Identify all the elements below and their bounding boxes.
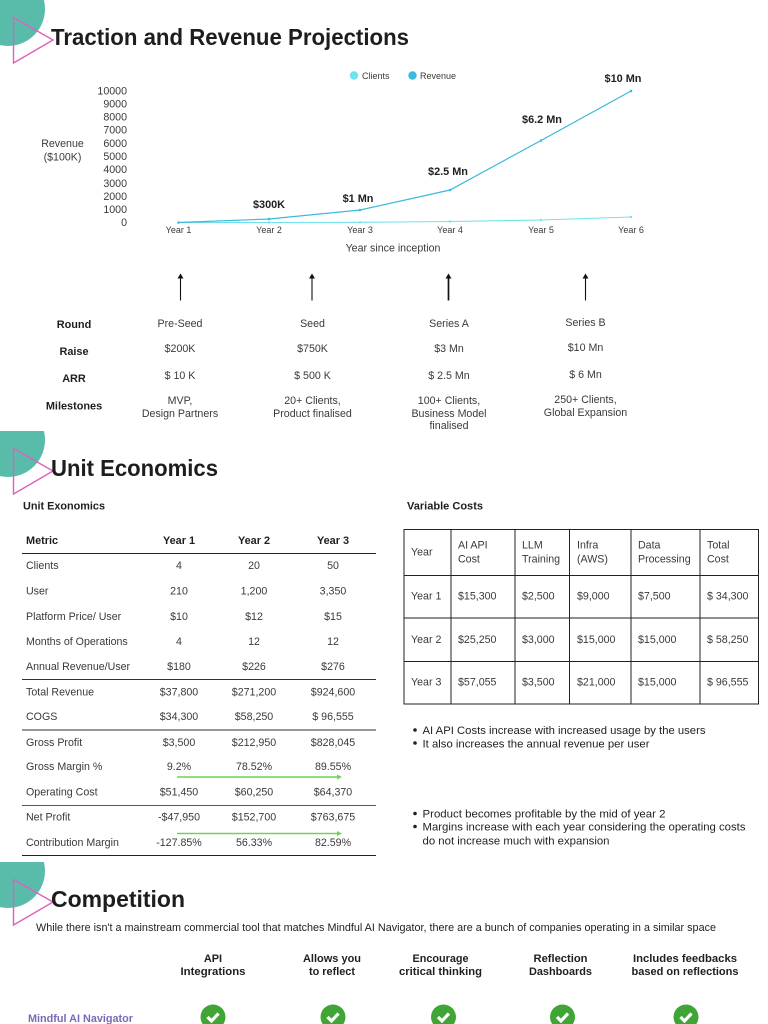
row: platform price: Platform Price/ User bbox=[26, 611, 122, 623]
table header: LLM bbox=[522, 540, 543, 552]
revenue data labels: $2.5 Mn bbox=[428, 166, 468, 178]
chart legend bbox=[350, 71, 456, 81]
row: operating cost: $51,450 bbox=[160, 786, 198, 798]
x axis labels: Year 4 bbox=[437, 225, 463, 235]
y axis title: ($100K) bbox=[44, 152, 81, 164]
row: platform price: $12 bbox=[245, 611, 263, 623]
row: year 3: $57,055 bbox=[458, 676, 497, 688]
row: clients: Clients bbox=[26, 560, 59, 572]
funding column: series a: $ 2.5 Mn bbox=[428, 370, 470, 382]
revenue data labels: $300K bbox=[253, 199, 285, 211]
funding column: seed: 20+ Clients, bbox=[284, 395, 341, 407]
bullet notes: profitability: Margins increase with each year considering the operating costs bbox=[422, 822, 746, 834]
y axis labels: 10000 bbox=[97, 86, 127, 98]
x axis labels: Year 5 bbox=[528, 225, 554, 235]
feature column headings: to reflect bbox=[309, 966, 355, 978]
row: year 2: $15,000 bbox=[577, 634, 616, 646]
row: year 1: $15,300 bbox=[458, 590, 497, 602]
revenue data labels: $1 Mn bbox=[343, 193, 373, 205]
x axis labels: Year 3 bbox=[347, 225, 373, 235]
table header: Year bbox=[411, 546, 433, 558]
y axis labels: 2000 bbox=[103, 191, 127, 203]
row: total revenue: $924,600 bbox=[311, 686, 355, 698]
bullet notes: profitability: do not increase much with expansion bbox=[422, 836, 610, 848]
row: gross margin: 78.52% bbox=[236, 761, 273, 773]
chart legend: Clients bbox=[362, 71, 390, 81]
row: operating cost: Operating Cost bbox=[26, 786, 98, 798]
y axis labels: 0 bbox=[121, 217, 127, 229]
funding column: series a: $3 Mn bbox=[434, 343, 464, 355]
funding column: series a: finalised bbox=[429, 420, 469, 432]
row: total revenue bbox=[26, 686, 355, 698]
funding column: seed: Seed bbox=[300, 318, 325, 330]
row: clients: 20 bbox=[248, 560, 260, 572]
row: operating cost: $60,250 bbox=[235, 786, 273, 798]
row: year 1: $7,500 bbox=[638, 590, 671, 602]
funding column: seed: $750K bbox=[297, 343, 328, 355]
row: user: User bbox=[26, 586, 49, 598]
table header: AI API bbox=[458, 540, 488, 552]
table header: Infra bbox=[577, 540, 598, 552]
row: platform price: $15 bbox=[324, 611, 342, 623]
row: total revenue: $37,800 bbox=[160, 686, 198, 698]
funding column: pre-seed bbox=[142, 318, 218, 420]
row: cogs: COGS bbox=[26, 711, 57, 723]
x axis labels: Year 1 bbox=[166, 225, 191, 235]
row: net profit: -$47,950 bbox=[158, 812, 200, 824]
funding column: seed: Product finalised bbox=[273, 408, 352, 420]
y axis labels: 7000 bbox=[103, 124, 127, 136]
row: year 1: Year 1 bbox=[411, 590, 441, 602]
row: operating cost: $64,370 bbox=[314, 786, 352, 798]
arrows: funding rounds bbox=[178, 274, 588, 300]
x axis labels bbox=[166, 225, 644, 235]
section: traction and revenue projections bbox=[0, 0, 644, 432]
table header: Metric bbox=[26, 535, 58, 547]
row: cogs bbox=[26, 711, 354, 723]
funding column: series b: 250+ Clients, bbox=[554, 394, 617, 406]
row: contribution margin bbox=[26, 837, 352, 849]
feature column headings: Dashboards bbox=[529, 966, 592, 978]
funding column: pre-seed: Design Partners bbox=[142, 408, 218, 420]
row: total revenue: $271,200 bbox=[232, 686, 276, 698]
funding column: series a: 100+ Clients, bbox=[418, 395, 480, 407]
bullet notes: profitability bbox=[413, 808, 746, 848]
funding table row labels: Milestones bbox=[46, 400, 102, 412]
table header: Year 2 bbox=[238, 535, 270, 547]
line chart: revenue and clients bbox=[41, 71, 644, 254]
x axis labels: Year 2 bbox=[256, 225, 282, 235]
row: year 1: $ 34,300 bbox=[707, 590, 749, 602]
funding column: pre-seed: $ 10 K bbox=[165, 370, 195, 382]
row: gross margin bbox=[26, 761, 352, 773]
row: year 3 bbox=[411, 676, 749, 688]
row: gross profit: $828,045 bbox=[311, 737, 355, 749]
row: year 3: Year 3 bbox=[411, 676, 441, 688]
funding column: pre-seed: MVP, bbox=[168, 395, 192, 407]
row: cogs: $ 96,555 bbox=[312, 711, 354, 723]
row: year 2: Year 2 bbox=[411, 634, 441, 646]
row: contribution margin: Contribution Margin bbox=[26, 837, 119, 849]
arrow: gross margin growth bbox=[177, 774, 342, 780]
row: months of operations: 4 bbox=[176, 636, 182, 648]
row: months of operations: 12 bbox=[327, 636, 339, 648]
y axis labels bbox=[97, 86, 127, 229]
subheading: variable costs: Variable Costs bbox=[407, 500, 483, 512]
table header: Processing bbox=[638, 554, 691, 566]
table header: Data bbox=[638, 540, 661, 552]
feature column headings: Encourage bbox=[412, 953, 468, 965]
feature column headings: critical thinking bbox=[399, 966, 482, 978]
feature column headings: Includes feedbacks bbox=[633, 953, 737, 965]
bullet notes: api costs: It also increases the annual revenue per user bbox=[422, 738, 650, 750]
funding column: series b: Global Expansion bbox=[544, 407, 627, 419]
row: platform price: $10 bbox=[170, 611, 188, 623]
feature column headings: API bbox=[204, 953, 222, 965]
table header bbox=[411, 540, 729, 566]
y axis labels: 9000 bbox=[103, 98, 127, 110]
funding column: pre-seed: Pre-Seed bbox=[158, 318, 203, 330]
row: year 2: $3,000 bbox=[522, 634, 555, 646]
row: year 3: $21,000 bbox=[577, 676, 616, 688]
row: cogs: $58,250 bbox=[235, 711, 273, 723]
chart legend: Revenue bbox=[420, 71, 456, 81]
row: net profit: $763,675 bbox=[311, 812, 355, 824]
subheading: unit exonomics: Unit Exonomics bbox=[23, 500, 105, 512]
table header: Year 1 bbox=[163, 535, 195, 547]
funding column: series b: Series B bbox=[565, 317, 606, 329]
revenue data labels: $6.2 Mn bbox=[522, 114, 562, 126]
row: user: 1,200 bbox=[241, 586, 267, 598]
section: unit economics bbox=[0, 403, 758, 856]
funding column: series b bbox=[544, 317, 627, 419]
row: year 1 bbox=[411, 590, 749, 602]
funding column: series a: Series A bbox=[429, 318, 470, 330]
row: contribution margin: -127.85% bbox=[156, 837, 202, 849]
row: gross margin: 89.55% bbox=[315, 761, 352, 773]
feature column headings bbox=[180, 953, 738, 978]
table header: Cost bbox=[458, 554, 480, 566]
table: unit economics bbox=[22, 535, 376, 856]
row: net profit bbox=[26, 812, 355, 824]
title: traction and revenue projections: Traction and Revenue Projections bbox=[51, 24, 409, 50]
arrow: contribution margin growth bbox=[177, 831, 342, 836]
y axis labels: 3000 bbox=[103, 178, 127, 190]
table: variable costs bbox=[404, 530, 758, 704]
funding column: series a bbox=[411, 318, 487, 432]
y axis labels: 6000 bbox=[103, 138, 127, 150]
y axis labels: 1000 bbox=[103, 204, 127, 216]
intro text: While there isn't a mainstream commercial tool that matches Mindful AI Navigator, there are a bunch of companies operating in a similar space bbox=[36, 922, 716, 934]
row: total revenue: Total Revenue bbox=[26, 686, 94, 698]
y axis title: Revenue bbox=[41, 138, 84, 150]
row: year 1: $9,000 bbox=[577, 590, 610, 602]
row: year 3: $15,000 bbox=[638, 676, 677, 688]
row: year 3: $3,500 bbox=[522, 676, 555, 688]
row: annual revenue per user: $226 bbox=[242, 661, 266, 673]
x axis labels: Year 6 bbox=[618, 225, 644, 235]
icon: teal circle and pink triangle bbox=[0, 862, 53, 926]
row: operating cost bbox=[26, 786, 352, 798]
row: gross profit: $3,500 bbox=[163, 737, 195, 749]
funding column: series b: $10 Mn bbox=[568, 342, 603, 354]
funding table row labels: ARR bbox=[62, 373, 86, 385]
y axis labels: 5000 bbox=[103, 151, 127, 163]
revenue line bbox=[177, 90, 632, 224]
feature column headings: Reflection bbox=[534, 953, 588, 965]
row: year 2: $25,250 bbox=[458, 634, 497, 646]
row: year 2: $15,000 bbox=[638, 634, 677, 646]
funding column: series b: $ 6 Mn bbox=[569, 369, 602, 381]
funding table row labels bbox=[46, 319, 102, 412]
row: user: 210 bbox=[170, 586, 188, 598]
clients line bbox=[178, 216, 632, 224]
row: annual revenue per user: Annual Revenue/User bbox=[26, 661, 131, 673]
row: gross margin: Gross Margin % bbox=[26, 761, 103, 773]
funding column: seed: $ 500 K bbox=[294, 370, 331, 382]
funding column: seed bbox=[273, 318, 352, 420]
row: year 2 bbox=[411, 634, 749, 646]
table header: Cost bbox=[707, 554, 729, 566]
row: year 1: $2,500 bbox=[522, 590, 555, 602]
feature column headings: Integrations bbox=[180, 966, 246, 978]
row: months of operations: Months of Operations bbox=[26, 636, 128, 648]
y axis labels: 8000 bbox=[103, 112, 127, 124]
row: annual revenue per user: $180 bbox=[167, 661, 191, 673]
y axis title bbox=[41, 138, 84, 164]
bullet notes: profitability: Product becomes profitable by the mid of year 2 bbox=[422, 808, 666, 820]
icon: teal circle and pink triangle bbox=[0, 431, 53, 496]
funding table row labels: Raise bbox=[59, 346, 89, 358]
feature column headings: based on reflections bbox=[632, 966, 738, 978]
row: months of operations: 12 bbox=[248, 636, 260, 648]
table header: Year 3 bbox=[317, 535, 349, 547]
funding table row labels: Round bbox=[57, 319, 91, 331]
row: year 3: $ 96,555 bbox=[707, 676, 749, 688]
table header: Total bbox=[707, 540, 729, 552]
row: gross margin: 9.2% bbox=[167, 761, 192, 773]
row: gross profit: Gross Profit bbox=[26, 737, 82, 749]
row: gross profit bbox=[26, 737, 355, 749]
row: contribution margin: 82.59% bbox=[315, 837, 352, 849]
feature column headings: Allows you bbox=[303, 953, 361, 965]
funding column: series a: Business Model bbox=[411, 408, 487, 420]
title: competition: Competition bbox=[51, 886, 185, 912]
row: months of operations bbox=[26, 636, 339, 648]
row: clients: 4 bbox=[176, 560, 182, 572]
bullet notes: api costs bbox=[413, 725, 706, 750]
table header bbox=[26, 535, 349, 547]
check icons bbox=[200, 1004, 698, 1024]
row: net profit: $152,700 bbox=[232, 812, 276, 824]
table header: (AWS) bbox=[577, 554, 608, 566]
title: unit economics: Unit Economics bbox=[51, 455, 218, 481]
funding column: pre-seed: $200K bbox=[165, 343, 195, 355]
y axis labels: 4000 bbox=[103, 164, 127, 176]
row: platform price bbox=[26, 611, 342, 623]
row: user bbox=[26, 586, 346, 598]
row: clients: 50 bbox=[327, 560, 339, 572]
revenue data labels bbox=[253, 73, 641, 211]
revenue data labels: $10 Mn bbox=[605, 73, 641, 85]
row: contribution margin: 56.33% bbox=[236, 837, 273, 849]
row: cogs: $34,300 bbox=[160, 711, 198, 723]
icon: teal circle and pink triangle bbox=[0, 0, 53, 63]
row: clients bbox=[26, 560, 339, 572]
row: net profit: Net Profit bbox=[26, 812, 70, 824]
row: annual revenue per user: $276 bbox=[321, 661, 345, 673]
row: annual revenue per user bbox=[26, 661, 345, 673]
x axis title: Year since inception bbox=[346, 242, 440, 254]
row: gross profit: $212,950 bbox=[232, 737, 276, 749]
bullet notes: api costs: AI API Costs increase with increased usage by the users bbox=[422, 725, 706, 737]
table header: Training bbox=[522, 554, 560, 566]
section: competition bbox=[0, 862, 738, 1024]
row: user: 3,350 bbox=[320, 586, 346, 598]
row: year 2: $ 58,250 bbox=[707, 634, 749, 646]
